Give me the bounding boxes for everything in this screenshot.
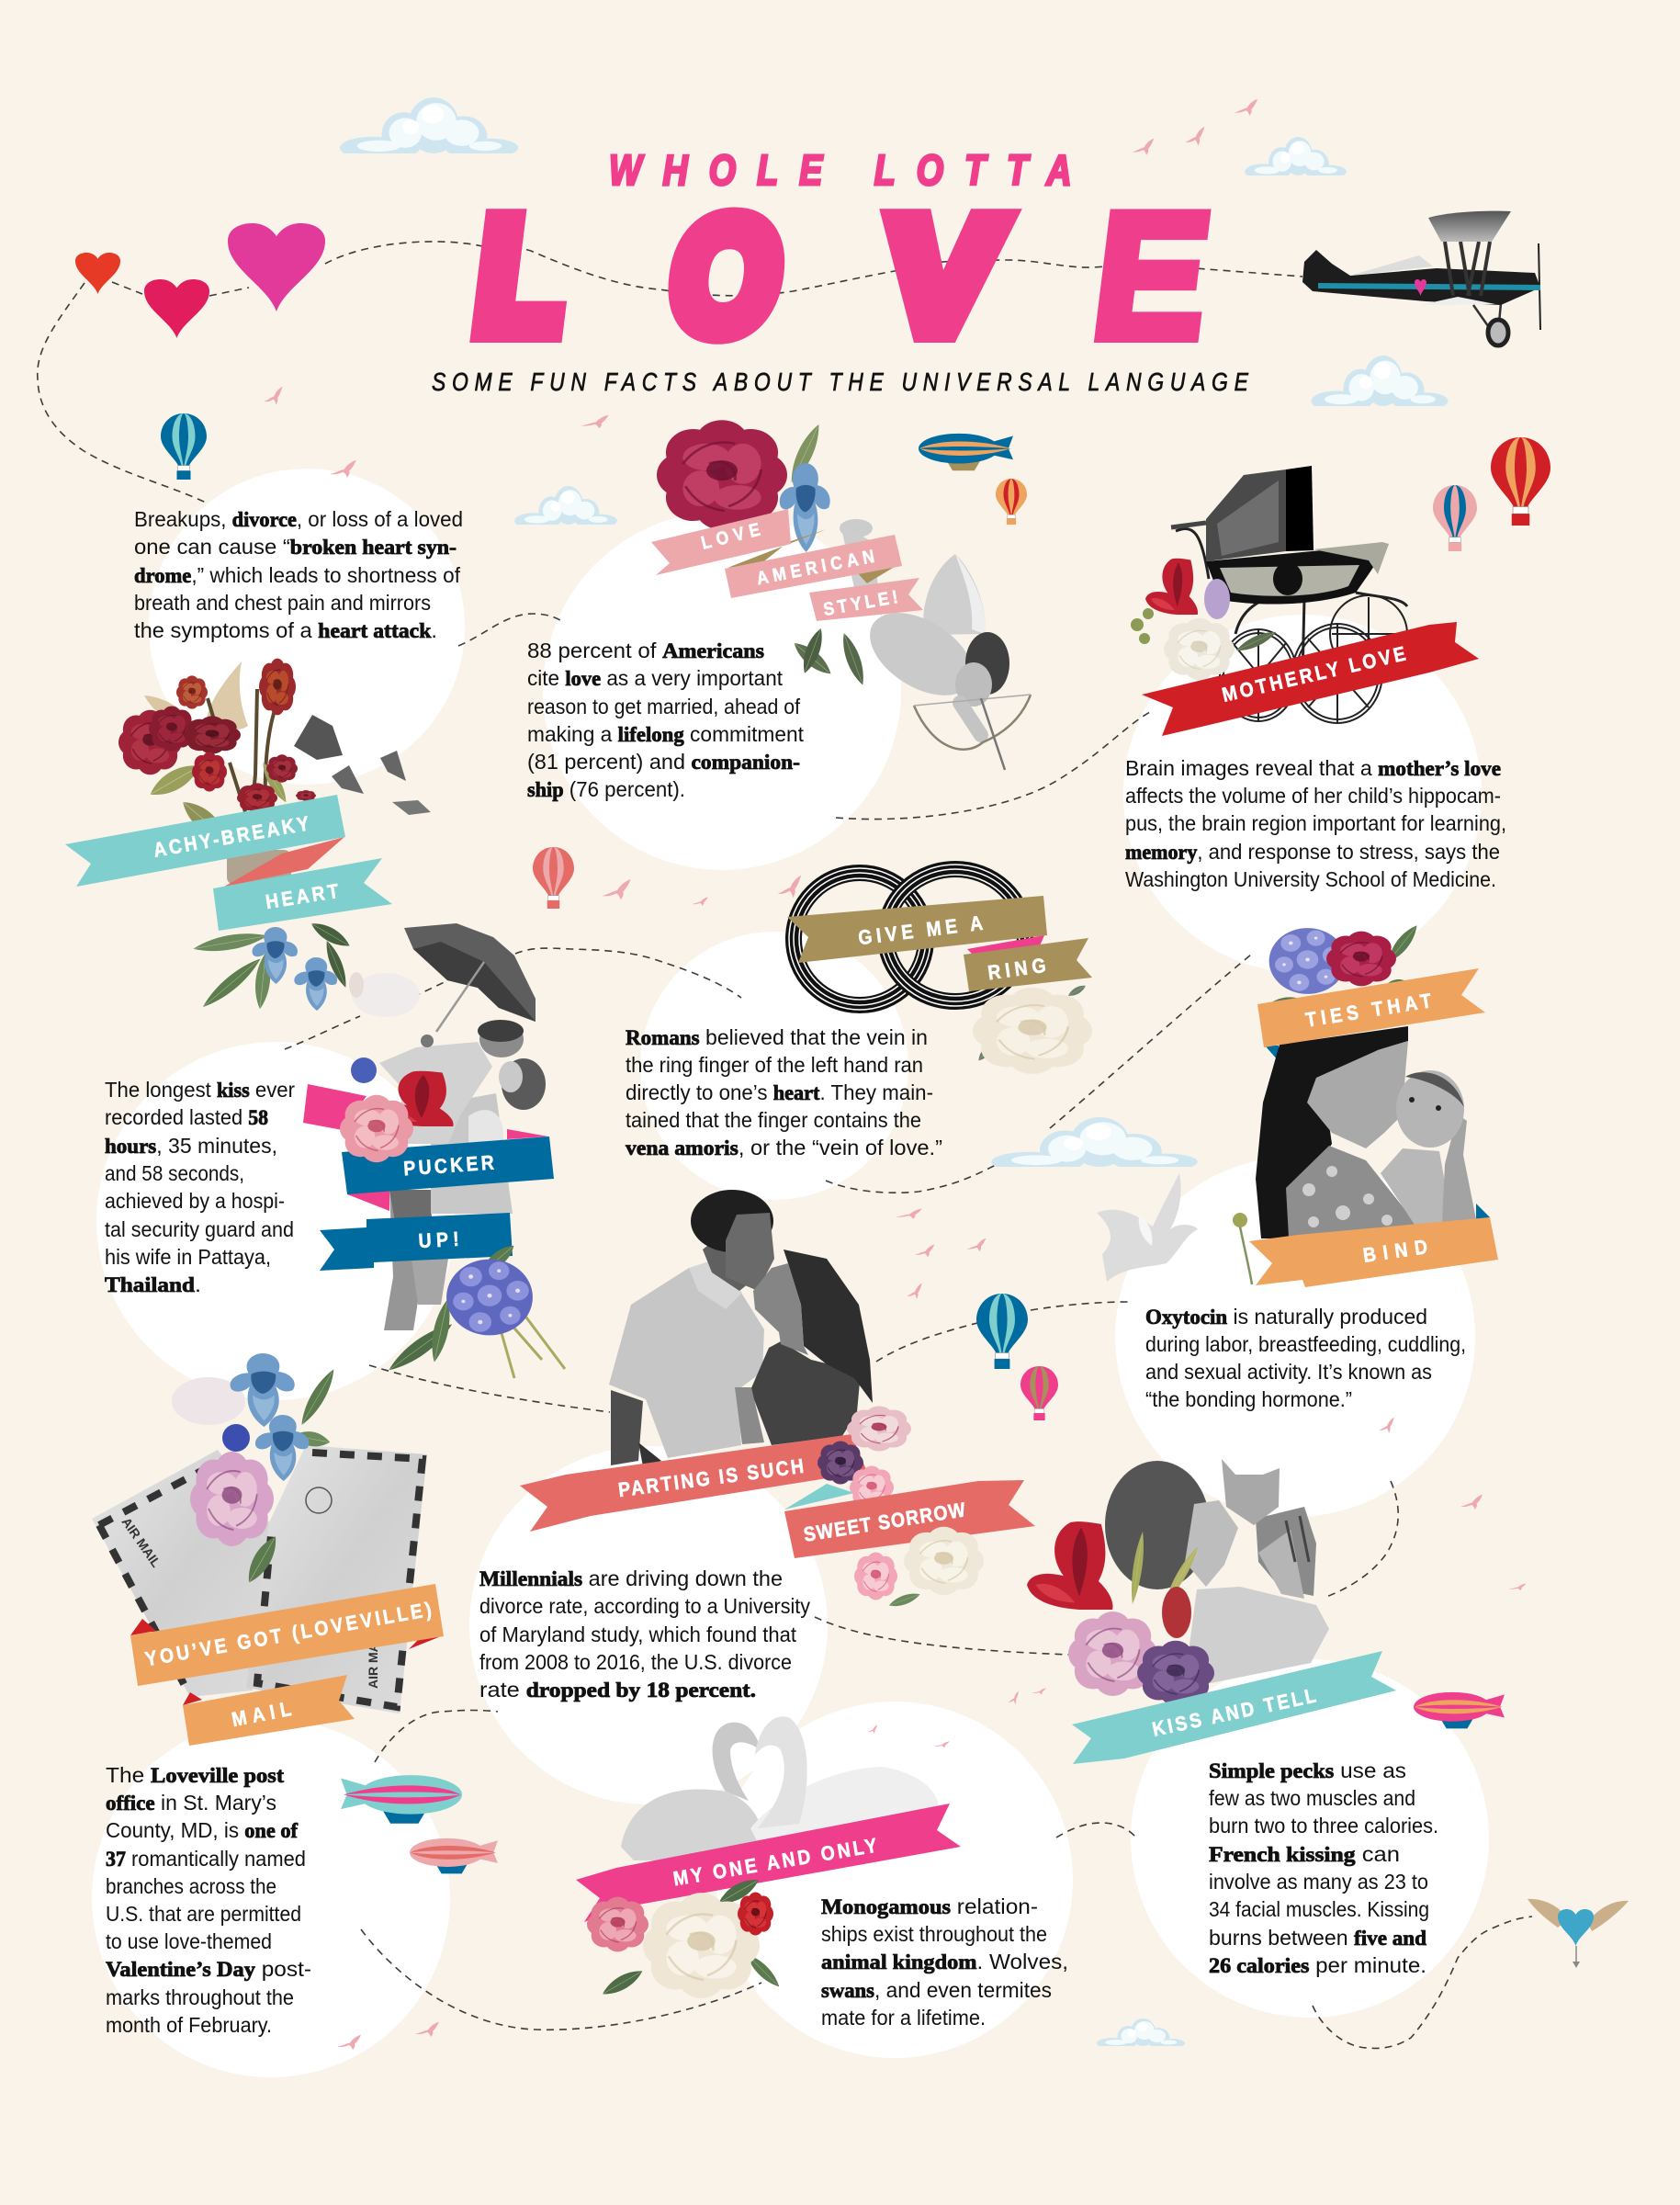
text: simple pecks: French kissing can	[1209, 1842, 1400, 1866]
text: broken heart: the symptoms of a heart attack.	[134, 618, 437, 642]
subtitle: SOME FUN FACTS ABOUT THE UNIVERSAL LANGUAGE	[432, 368, 1249, 397]
text: longest kiss: achieved by a hospi-	[105, 1189, 285, 1213]
banner: you've got	[130, 1584, 444, 1686]
panel art: parting couple	[520, 1190, 1035, 1610]
text: longest kiss: Thailand .	[105, 1272, 201, 1296]
text: americans: making a lifelong commitment	[527, 722, 805, 746]
text: romans: directly to one’s heart. They main-	[626, 1080, 933, 1104]
text: monogamous: ships exist throughout the	[821, 1922, 1047, 1946]
text: oxytocin: during labor, breastfeeding, cuddling,	[1145, 1332, 1466, 1356]
text: romans: tained that the finger contains the	[626, 1108, 921, 1132]
teal fold	[784, 1484, 854, 1510]
text: monogamous: Monogamous relation-	[821, 1894, 1038, 1918]
text: mother's love: memory, and response to stress, says the	[1125, 840, 1500, 864]
text: broken heart: breath and chest pain and mirrors	[134, 591, 431, 615]
text: oxytocin	[1145, 1305, 1466, 1411]
dried roses	[118, 659, 316, 850]
title: love: O	[662, 187, 790, 366]
mother and baby photo	[1256, 1026, 1476, 1240]
banner titles: BIND	[1361, 1236, 1429, 1267]
banner: kiss and tell	[1072, 1651, 1396, 1764]
text: loveville: Valentine’s Day post-	[106, 1957, 311, 1981]
banner: pucker	[342, 1136, 554, 1194]
text: millennials: Millennials are driving down the	[479, 1566, 783, 1590]
text: romans: vena amoris, or the “vein of love.”	[626, 1136, 942, 1159]
kitten	[1222, 1459, 1316, 1599]
clouds	[340, 97, 1448, 2049]
text: americans: (81 percent) and companion-	[527, 750, 800, 774]
text: romans: Romans believed that the vein in	[626, 1025, 928, 1049]
banner titles: KISS AND TELL	[1150, 1684, 1318, 1741]
text: simple pecks: Simple pecks use as	[1209, 1758, 1406, 1782]
banner: ties that	[1257, 968, 1485, 1047]
panel art: envelopes	[92, 1353, 444, 1746]
dove	[1097, 1173, 1198, 1282]
text: americans	[527, 639, 805, 801]
text: romans	[626, 1025, 942, 1159]
text: simple pecks: 34 facial muscles. Kissing	[1209, 1897, 1429, 1921]
text: longest kiss: The longest kiss ever	[105, 1078, 295, 1102]
text: mother's love	[1125, 756, 1506, 891]
falling petals	[294, 715, 431, 815]
right envelope: AIR MAIL	[366, 1631, 380, 1689]
title: love: L	[468, 187, 575, 365]
blue folds	[1265, 1046, 1490, 1243]
text: longest kiss: hours, 35 minutes,	[105, 1134, 277, 1158]
flower cluster	[817, 1406, 911, 1510]
title: love	[468, 177, 1220, 376]
banner: american	[725, 535, 902, 598]
text: millennials: rate dropped by 18 percent.	[479, 1678, 756, 1702]
text: monogamous	[821, 1894, 1068, 2030]
red folds	[130, 1619, 441, 1705]
vase	[227, 850, 291, 885]
text: americans: ship (76 percent).	[527, 777, 685, 801]
flowers top	[1264, 922, 1422, 1014]
text: loveville: office in St. Mary’s	[106, 1791, 276, 1815]
text: americans: reason to get married, ahead of	[527, 695, 801, 718]
flowers: rose and lily	[340, 1057, 454, 1162]
hot air balloons	[161, 413, 1550, 1420]
text: oxytocin: and sexual activity. It’s known as	[1145, 1360, 1432, 1384]
coral fold	[224, 837, 344, 887]
text: loveville	[106, 1763, 311, 2037]
banner: my one and only	[576, 1804, 961, 1922]
text: millennials	[479, 1566, 810, 1702]
text: longest kiss: and 58 seconds,	[105, 1161, 244, 1185]
text: broken heart: Breakups, divorce, or loss of a loved	[134, 507, 463, 531]
blimps	[341, 434, 1505, 1873]
banner titles: SWEET SORROW	[802, 1498, 967, 1546]
panel art: achy-breaky heart	[65, 659, 431, 1017]
text: millennials: of Maryland study, which found that	[479, 1623, 797, 1646]
banner titles: MAIL	[230, 1698, 293, 1731]
icon: winged heart	[1528, 1899, 1629, 1968]
text: broken heart: one can cause “ broken heart syn-	[134, 535, 457, 559]
banner titles: YOU’VE GOT (LOVEVILLE)	[143, 1599, 433, 1671]
banner: achy-breaky	[65, 795, 345, 887]
left envelope: AIR MAIL	[119, 1515, 164, 1570]
title: love: E	[1084, 177, 1220, 376]
panel art: motherly love	[1131, 466, 1479, 736]
text: longest kiss: recorded lasted 58	[105, 1105, 268, 1129]
cherub	[840, 519, 1031, 770]
banner: give me a	[787, 896, 1047, 963]
banner: style	[809, 578, 923, 621]
text: mother's love: affects the volume of her child’s hippocam-	[1125, 784, 1501, 808]
text: loveville: marks throughout the	[106, 1985, 294, 2009]
girl	[1105, 1461, 1329, 1684]
text: monogamous: mate for a lifetime.	[821, 2006, 986, 2030]
banner titles: AMERICAN	[755, 546, 876, 589]
white circles behind facts	[92, 469, 1489, 2077]
text: americans: 88 percent of Americans	[527, 639, 764, 662]
text: longest kiss	[105, 1078, 295, 1296]
banner titles: MOTHERLY LOVE	[1220, 642, 1408, 707]
banner titles	[143, 519, 1433, 1891]
text: simple pecks: 26 calories per minute.	[1209, 1953, 1426, 1977]
panel art: ties that bind	[1097, 922, 1498, 1287]
text: monogamous: swans, and even termites	[821, 1978, 1052, 2002]
banner titles: LOVE	[699, 519, 762, 553]
panel art: give me a ring	[787, 865, 1092, 1074]
text: millennials: from 2008 to 2016, the U.S. divorce	[479, 1650, 792, 1674]
text: mother's love: Washington University School of Medicine.	[1125, 867, 1496, 891]
rings	[789, 865, 1030, 1010]
banner: sweet sorrow	[784, 1480, 1035, 1558]
banner: love	[651, 509, 791, 575]
iris and peony	[657, 420, 869, 687]
flowers	[1027, 1521, 1214, 1705]
text: romans: the ring finger of the left hand ran	[626, 1053, 923, 1077]
title: love: V	[876, 187, 1009, 365]
flowers: hydrangea	[384, 1240, 565, 1378]
text: loveville: to use love-themed	[106, 1929, 272, 1953]
text: oxytocin: Oxytocin is naturally produced	[1145, 1305, 1427, 1329]
text: longest kiss: his wife in Pattaya,	[105, 1245, 271, 1269]
right envelope	[246, 1445, 427, 1713]
panel art: kissing kitten	[1027, 1459, 1396, 1764]
pink fold	[967, 935, 1044, 956]
banner: mail	[183, 1675, 355, 1746]
text: loveville: U.S. that are permitted	[106, 1902, 301, 1926]
banner titles: HEART	[264, 880, 341, 914]
kissing couple	[379, 1020, 546, 1330]
text: americans: cite love as a very important	[527, 666, 784, 690]
title: whole lotta: WHOLE LOTTA	[609, 146, 1071, 194]
text: broken heart	[134, 507, 463, 642]
text: simple pecks: burn two to three calories.	[1209, 1814, 1438, 1838]
flower cluster below	[854, 1527, 984, 1610]
banner: heart	[213, 858, 392, 931]
banner titles: PARTING IS SUCH	[617, 1455, 805, 1502]
lower bouquet	[192, 918, 420, 1017]
panel art: love american style	[651, 420, 1031, 770]
white peony	[973, 983, 1092, 1074]
birds	[265, 99, 1527, 2050]
banner: bind	[1249, 1217, 1498, 1287]
panel art: pucker up	[303, 923, 565, 1378]
rosebud	[1233, 1213, 1252, 1284]
text: millennials: divorce rate, according to a University	[479, 1594, 810, 1618]
swan bodies	[621, 1716, 939, 1860]
pram	[1171, 466, 1407, 723]
gold folds	[727, 529, 902, 583]
text: mother's love: pus, the brain region important for learning,	[1125, 811, 1506, 835]
text: broken heart: drome,” which leads to shortness of	[134, 563, 461, 587]
umbrella	[404, 923, 536, 1032]
text: loveville: month of February.	[106, 2013, 272, 2037]
text: mother's love: Brain images reveal that a mother’s love	[1125, 756, 1501, 780]
text: simple pecks: burns between five and	[1209, 1926, 1426, 1950]
banner titles: MY ONE AND ONLY	[671, 1835, 879, 1891]
text: loveville: County, MD, is one of	[106, 1818, 298, 1842]
banner: parting is such	[520, 1434, 867, 1532]
icon: biplane	[1302, 211, 1540, 345]
banner titles: PUCKER	[403, 1151, 495, 1181]
text: simple pecks	[1209, 1758, 1438, 1977]
panel art: swans	[576, 1716, 961, 2000]
bouquet	[1131, 559, 1279, 680]
pink fold	[303, 1084, 548, 1222]
banner: ring	[964, 938, 1092, 991]
banner titles: UP!	[418, 1228, 459, 1252]
text: loveville: 37 romantically named	[106, 1847, 306, 1871]
banner titles: TIES THAT	[1304, 989, 1433, 1032]
flowers	[172, 1353, 340, 1587]
banner titles: STYLE!	[822, 586, 899, 619]
left envelope	[92, 1450, 269, 1697]
banner: motherly love	[1142, 622, 1479, 736]
dashed flight path	[38, 242, 1532, 2048]
banner titles: GIVE ME A	[857, 912, 984, 950]
text: monogamous: animal kingdom . Wolves,	[821, 1950, 1068, 1973]
flower cluster	[587, 1874, 784, 2000]
banner titles: RING	[987, 955, 1047, 985]
text: loveville: The Loveville post	[106, 1763, 284, 1787]
couple photo	[609, 1190, 873, 1466]
text: simple pecks: few as two muscles and	[1209, 1786, 1415, 1810]
text: oxytocin: “the bonding hormone.”	[1145, 1387, 1352, 1411]
banner titles: ACHY-BREAKY	[152, 812, 311, 862]
text: longest kiss: tal security guard and	[105, 1217, 294, 1241]
banner: up	[320, 1213, 513, 1271]
hearts string	[75, 223, 325, 338]
text: loveville: branches across the	[106, 1874, 276, 1898]
text: simple pecks: involve as many as 23 to	[1209, 1870, 1428, 1894]
